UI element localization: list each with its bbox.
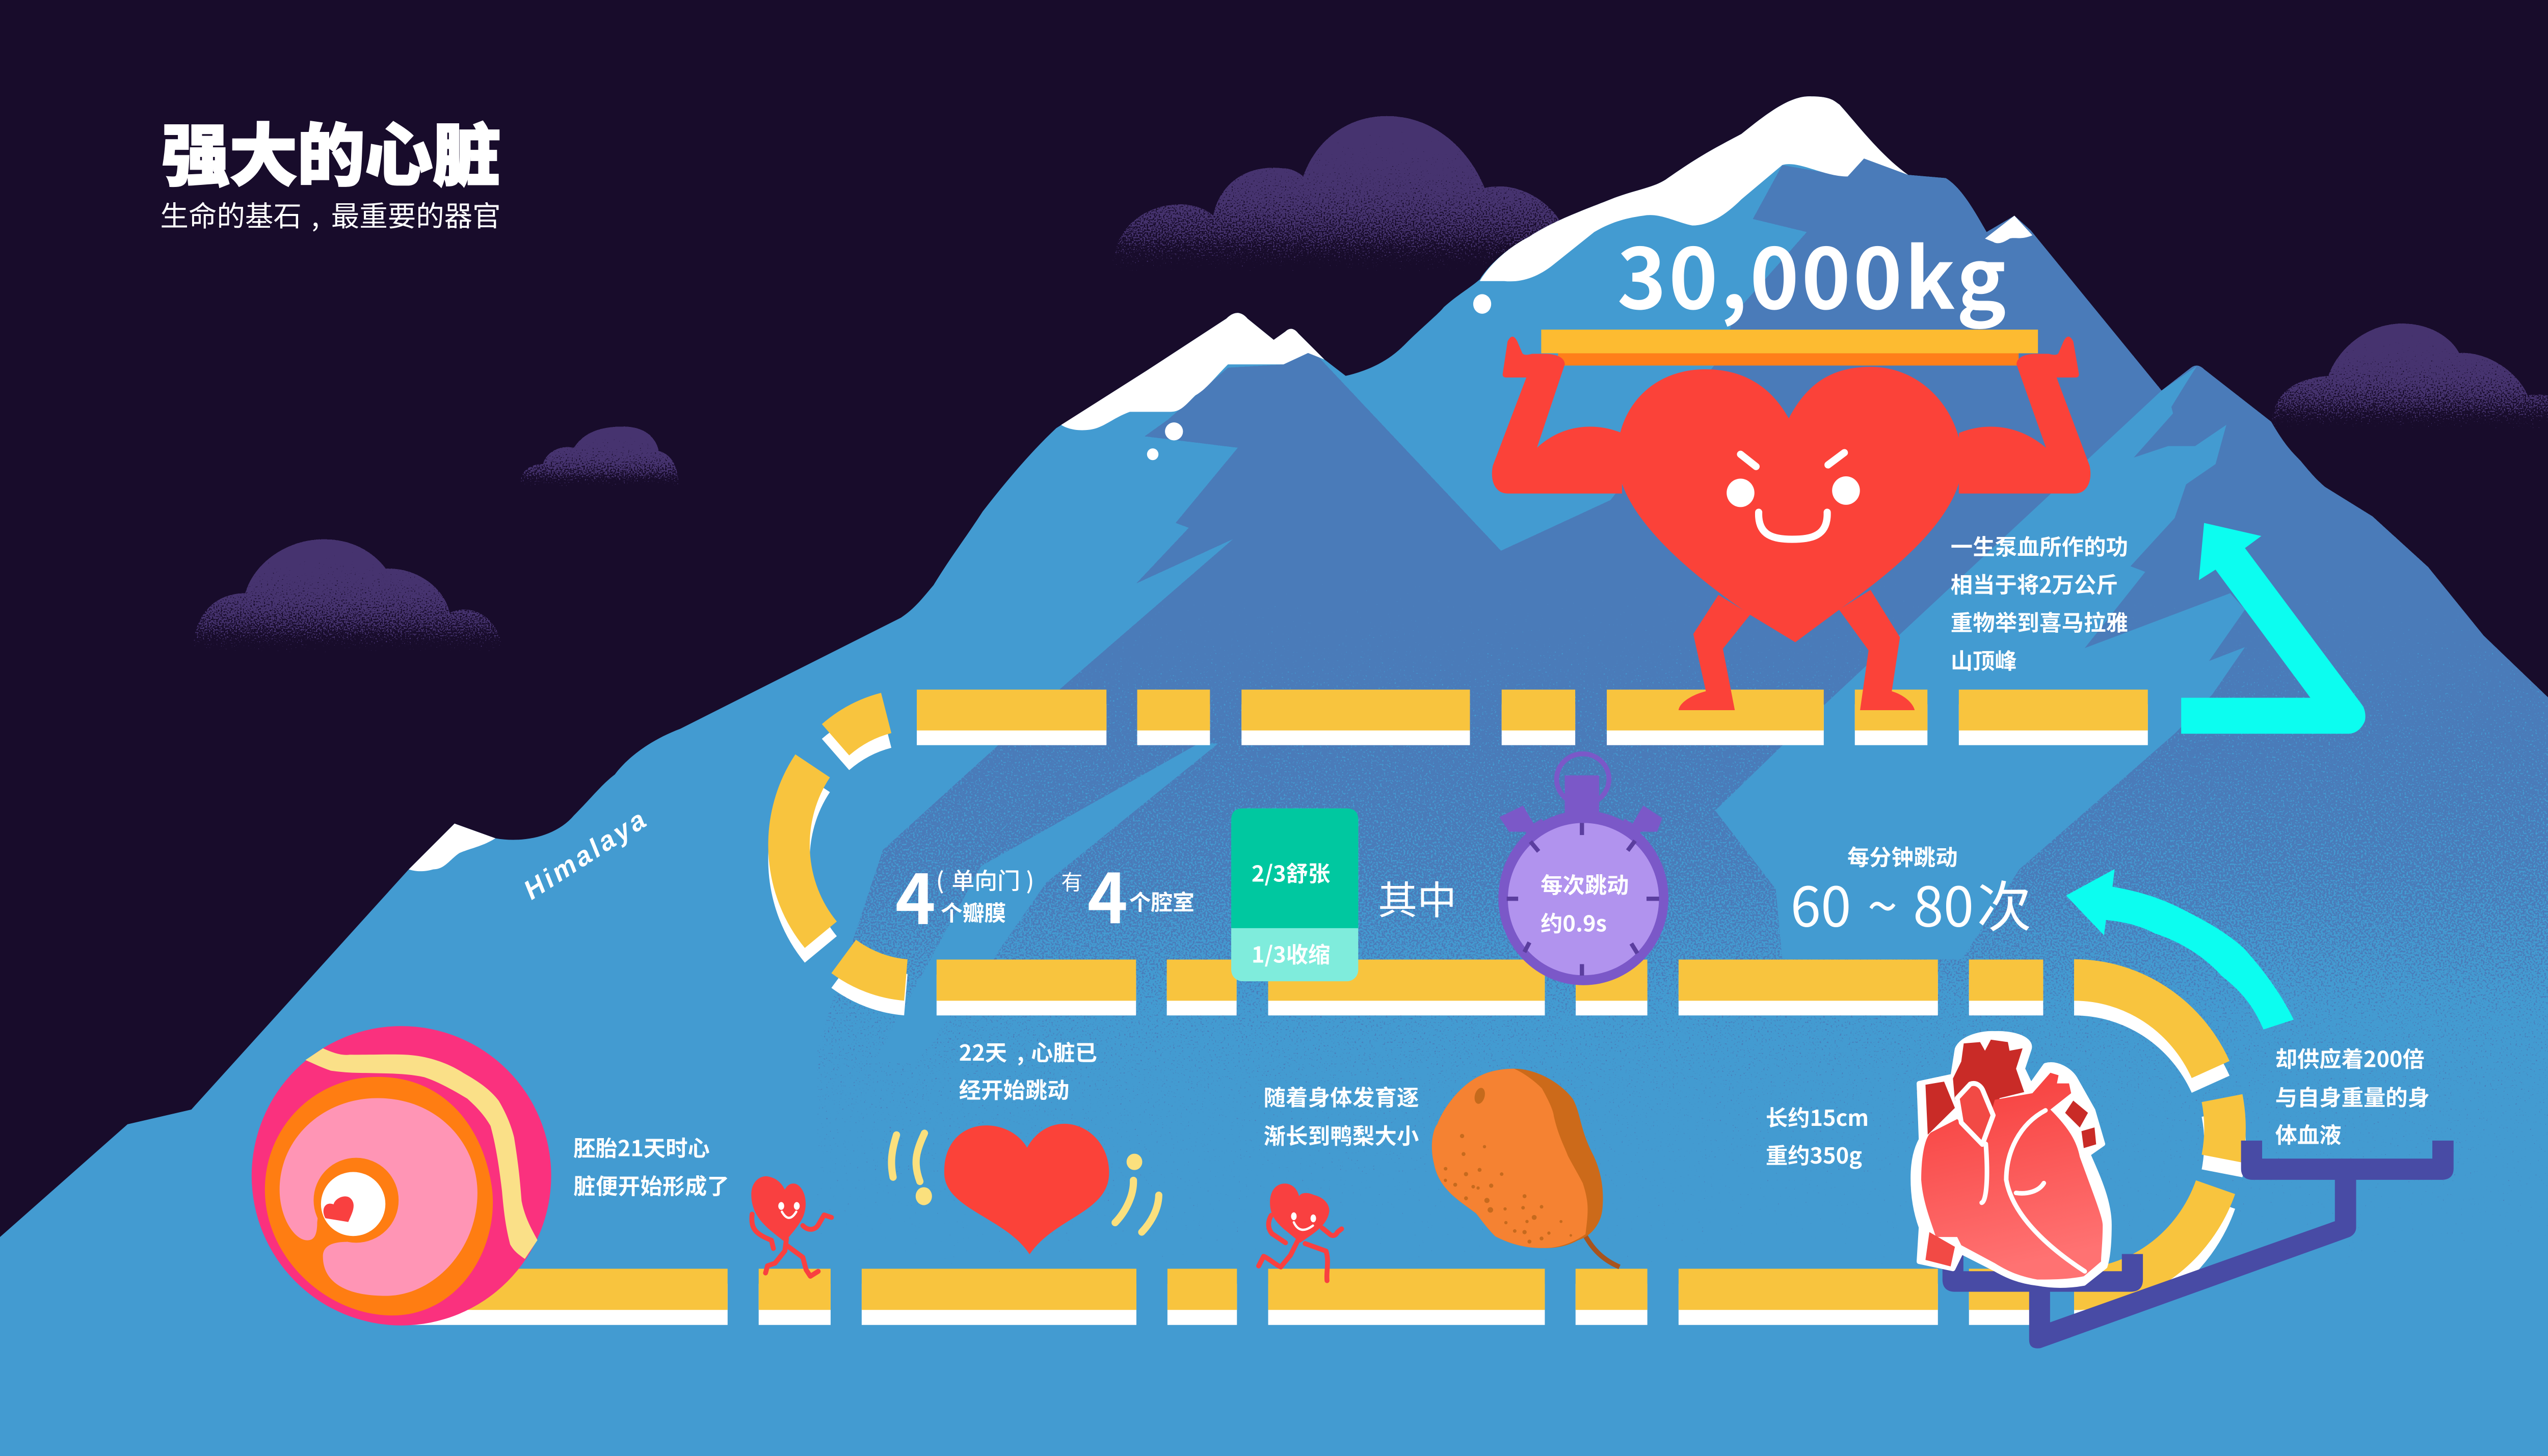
text: beats per minute: ~	[1867, 863, 1898, 942]
icon: beating heart	[944, 1124, 1109, 1254]
text: grows to pear size: 随着身体发育逐	[1264, 1081, 1419, 1112]
text: valves and chambers: (	[936, 862, 944, 896]
text: of which: 其中	[1378, 870, 1456, 926]
icon: strong heart lifting weight	[1492, 337, 2090, 710]
icon: pear	[1432, 1069, 1620, 1267]
text: valves and chambers: 4	[895, 845, 936, 944]
heart body	[1617, 367, 1962, 642]
left curve of the path	[789, 713, 906, 994]
arrow: cyan upward corner arrow	[2181, 523, 2366, 734]
winding path	[409, 690, 2225, 1325]
text: valves and chambers	[895, 844, 1195, 944]
icon: heartbeat motion marks	[891, 1133, 1159, 1232]
light diagonal strip	[875, 743, 1218, 1062]
text: embryo 21 days: 脏便开始形成了	[573, 1169, 729, 1201]
icon: anatomical heart	[1913, 1034, 2109, 1285]
card: diastole and systole ratio	[1231, 808, 1358, 981]
clouds	[193, 116, 2548, 652]
left arm	[1492, 337, 1622, 494]
text: embryo 21 days: 胚胎21天时心	[573, 1131, 710, 1163]
dark vessels	[1925, 1040, 2096, 1148]
front mountain light face	[1715, 366, 2245, 959]
right arm	[1959, 337, 2090, 494]
icon: scale	[1943, 1141, 2454, 1349]
text: beats per minute: 80	[1913, 863, 1974, 942]
icon: stopwatch	[1498, 754, 1668, 985]
text: blood supply: 却供应着200倍	[2275, 1042, 2425, 1074]
text: valves and chambers: 个腔室	[1129, 886, 1195, 917]
heart chambers	[1921, 1073, 2103, 1280]
icon: stopwatch: 约0.9s	[1541, 906, 1607, 938]
white outline	[1913, 1034, 2109, 1285]
icon: running heart two	[1259, 1183, 1342, 1281]
text: lifetime work: 一生泵血所作的功	[1951, 530, 2128, 561]
text: embryo 21 days	[573, 1131, 729, 1201]
text: valves and chambers: 个瓣膜	[941, 897, 1006, 927]
text: size and weight: 长约15cm	[1766, 1101, 1869, 1133]
arrow: cyan curved arrow	[2066, 869, 2294, 1030]
white vessel lines	[1982, 1111, 2085, 1272]
shaded mountain faces	[817, 158, 2548, 1307]
icon: stopwatch: 每次跳动	[1541, 868, 1629, 900]
text: 22 days	[959, 1036, 1097, 1105]
label: Himalaya: Himalaya	[518, 804, 651, 905]
text: lifetime work: 山顶峰	[1951, 644, 2017, 676]
text: 22 days: 22天	[959, 1036, 1007, 1067]
subtitle: 最重要的器官	[331, 194, 501, 234]
subtitle: 生命的基石	[160, 194, 302, 234]
top row of the path	[917, 690, 2148, 745]
text: size and weight: 重约350g	[1766, 1139, 1862, 1170]
text: lifetime work: 重物举到喜马拉雅	[1951, 606, 2128, 637]
text: lifetime work	[1951, 530, 2128, 676]
text: grows to pear size: 渐长到鸭梨大小	[1264, 1119, 1419, 1150]
snow caps	[409, 96, 2032, 871]
text: 22 days: 经开始跳动	[959, 1073, 1069, 1105]
text: blood supply: 与自身重量的身	[2275, 1081, 2430, 1112]
headline: 30,000kg: 30,000kg	[1617, 212, 2006, 333]
middle row of the path	[937, 960, 2043, 1015]
text: beats per minute: 次	[1977, 863, 2032, 942]
text: size and weight	[1766, 1101, 1869, 1170]
icon: embryo	[252, 1026, 551, 1326]
right curve of the path	[2074, 980, 2225, 1304]
barbell	[1541, 330, 2038, 366]
text: valves and chambers: 单向门	[951, 862, 1020, 896]
card: diastole and systole ratio: 2/3舒张	[1252, 857, 1330, 888]
title: 强大的心脏	[162, 102, 500, 200]
text: blood supply	[2275, 1042, 2430, 1150]
text: grows to pear size	[1264, 1081, 1419, 1150]
text: 22 days: 心脏已	[1031, 1036, 1097, 1067]
text: 22 days: ,	[1017, 1036, 1024, 1067]
subtitle: ,	[311, 194, 320, 234]
text: lifetime work: 相当于将2万公斤	[1951, 568, 2118, 600]
pulmonary artery	[1957, 1084, 1993, 1144]
text: beats per minute: 60	[1790, 863, 1851, 942]
icon: running heart one	[751, 1176, 832, 1276]
text: blood supply: 体血液	[2275, 1118, 2342, 1150]
text: beats per minute	[1790, 840, 2032, 942]
text: valves and chambers: 有	[1061, 866, 1082, 897]
legs	[1679, 595, 1750, 710]
bottom row of the path	[409, 1269, 2043, 1325]
text: valves and chambers: )	[1026, 862, 1034, 896]
card: diastole and systole ratio: 1/3收缩	[1252, 937, 1330, 969]
lower vessel	[1925, 1232, 1955, 1266]
text: valves and chambers: 4	[1087, 844, 1128, 943]
text: beats per minute: 每分钟跳动	[1847, 840, 1958, 872]
face	[1727, 453, 1860, 540]
